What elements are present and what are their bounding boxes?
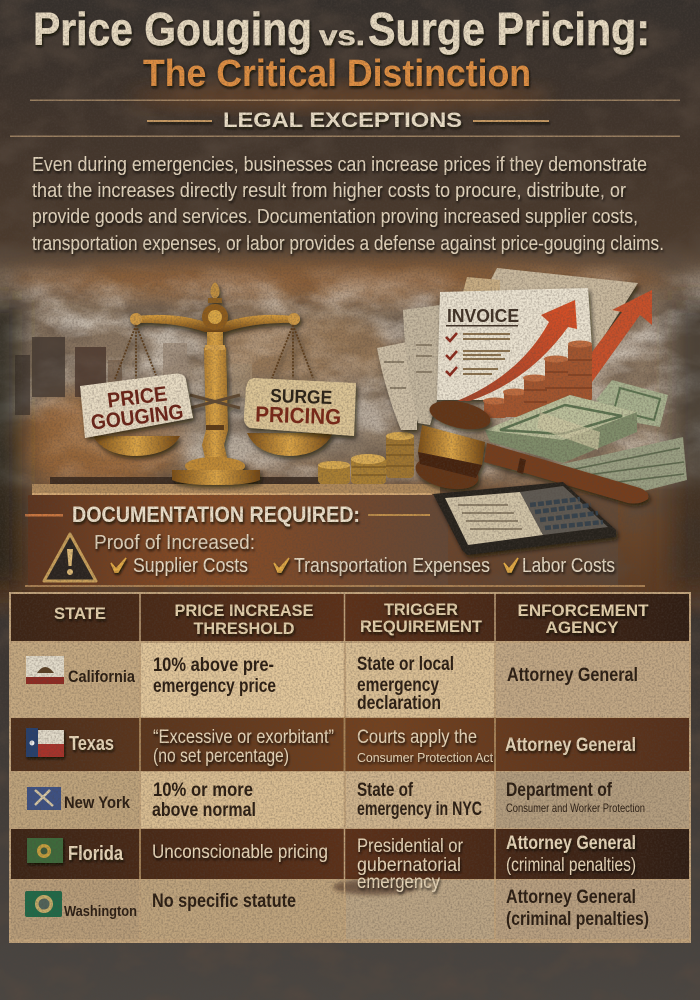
arrow: red rising main [457, 300, 577, 401]
new york row: Consumer and Worker Protection [506, 801, 645, 815]
checklist: cost types: Transportation Expenses [294, 555, 490, 577]
title: Price Gouging [33, 3, 312, 55]
checklist: cost types [111, 555, 615, 577]
icon: calculator [433, 482, 616, 555]
panel: documentation required [25, 502, 615, 581]
texas row [26, 727, 636, 767]
threshold: washington: No specific statute [152, 891, 296, 912]
table header row: THRESHOLD [194, 619, 294, 638]
table header row: ENFORCEMENT [518, 601, 649, 620]
trigger: texas: Courts apply the [357, 727, 477, 748]
icon: gavel [413, 396, 648, 504]
icon: warning triangle [44, 534, 96, 581]
agency: washington: Attorney General [506, 887, 636, 908]
illustration: scales, invoices, cash and gavel [0, 262, 700, 590]
table header row: TRIGGER [384, 600, 458, 619]
back papers [377, 268, 638, 430]
table header row: PRICE INCREASE [174, 601, 314, 620]
texas row: (no set percentage) [153, 746, 289, 767]
gold coin stacks [318, 432, 414, 484]
new york row: emergency in NYC [357, 799, 482, 820]
legal exceptions paragraph: that the increases directly result from higher costs to procure, distribute, or [32, 180, 626, 202]
trigger: california: State or local [357, 654, 454, 675]
title [33, 3, 650, 55]
california row [26, 654, 638, 714]
washington row [25, 887, 649, 930]
cash bills [485, 380, 687, 492]
threshold: new york: 10% or more [153, 780, 253, 801]
trigger: california [357, 654, 454, 714]
state comparison table [9, 592, 691, 943]
tag: surge pricing: PRICING [255, 402, 342, 429]
section rule bottom [10, 136, 680, 137]
checklist: cost types: Labor Costs [522, 555, 615, 577]
agency: california: Attorney General [507, 665, 638, 686]
state name: washington: Washington [64, 903, 137, 920]
trigger: new york: State of [357, 780, 414, 801]
new york row [27, 780, 645, 821]
flag: new york [27, 787, 61, 810]
heading: documentation required: DOCUMENTATION REQUIRED: [72, 502, 360, 527]
state name: new york: New York [64, 793, 130, 812]
florida row [27, 833, 636, 893]
table header row [11, 594, 689, 641]
title: Surge Pricing: [368, 3, 650, 55]
flag: california [26, 656, 64, 684]
legal exceptions paragraph: provide goods and services. Documentation proving increased supplier costs, [32, 206, 638, 228]
agency: florida: Attorney General [506, 833, 636, 854]
table header row: AGENCY [546, 618, 619, 637]
section rule top [30, 100, 680, 101]
panel: documentation background [28, 495, 448, 585]
california row: emergency price [153, 676, 276, 697]
tag: surge pricing: SURGE [270, 386, 333, 409]
agency: new york: Department of [506, 780, 613, 801]
flag: texas [26, 728, 64, 757]
title: vs. [319, 20, 365, 51]
legal exceptions paragraph [32, 154, 664, 255]
threshold: texas: “Excessive or exorbitant” [153, 727, 334, 748]
flag: florida [27, 838, 63, 863]
threshold: florida: Unconscionable pricing [152, 842, 328, 863]
agency: texas: Attorney General [505, 735, 636, 756]
skyline [15, 337, 252, 415]
trigger: california: declaration [357, 693, 441, 714]
trigger: florida [357, 836, 464, 893]
text: proof of increased: Proof of Increased: [94, 532, 255, 554]
tag: price gouging [80, 374, 193, 438]
arrow: red rising back [592, 290, 652, 382]
new york row: above normal [152, 800, 256, 821]
tag: price gouging: PRICE [106, 382, 168, 413]
subtitle: The Critical Distinction [143, 53, 531, 95]
tag: surge pricing [244, 378, 356, 436]
table header row: STATE [54, 604, 106, 623]
washington row: (criminal penalties) [506, 909, 649, 930]
copper coin stacks [483, 340, 592, 418]
table ledge [32, 484, 440, 494]
cell fills [11, 643, 139, 717]
checklist: cost types: Supplier Costs [133, 555, 248, 577]
state name: texas: Texas [69, 733, 114, 755]
invoice document: INVOICE [447, 306, 519, 326]
icon: balance scale [93, 282, 333, 485]
section heading: legal exceptions: LEGAL EXCEPTIONS [223, 109, 462, 132]
trigger: florida: emergency [357, 872, 440, 893]
trigger: florida: gubernatorial [357, 855, 461, 876]
florida row: (criminal penalties) [506, 855, 636, 876]
texas row: Consumer Protection Act [357, 750, 493, 765]
invoice document [437, 288, 592, 400]
trigger: california: emergency [357, 675, 439, 696]
state name: california: California [68, 667, 135, 686]
state name: florida: Florida [68, 843, 124, 865]
threshold: california: 10% above pre- [153, 655, 274, 676]
tag: price gouging: GOUGING [90, 400, 185, 435]
trigger: florida: Presidential or [357, 836, 464, 857]
table header row: REQUIREMENT [360, 617, 483, 636]
flag: washington [25, 891, 62, 917]
